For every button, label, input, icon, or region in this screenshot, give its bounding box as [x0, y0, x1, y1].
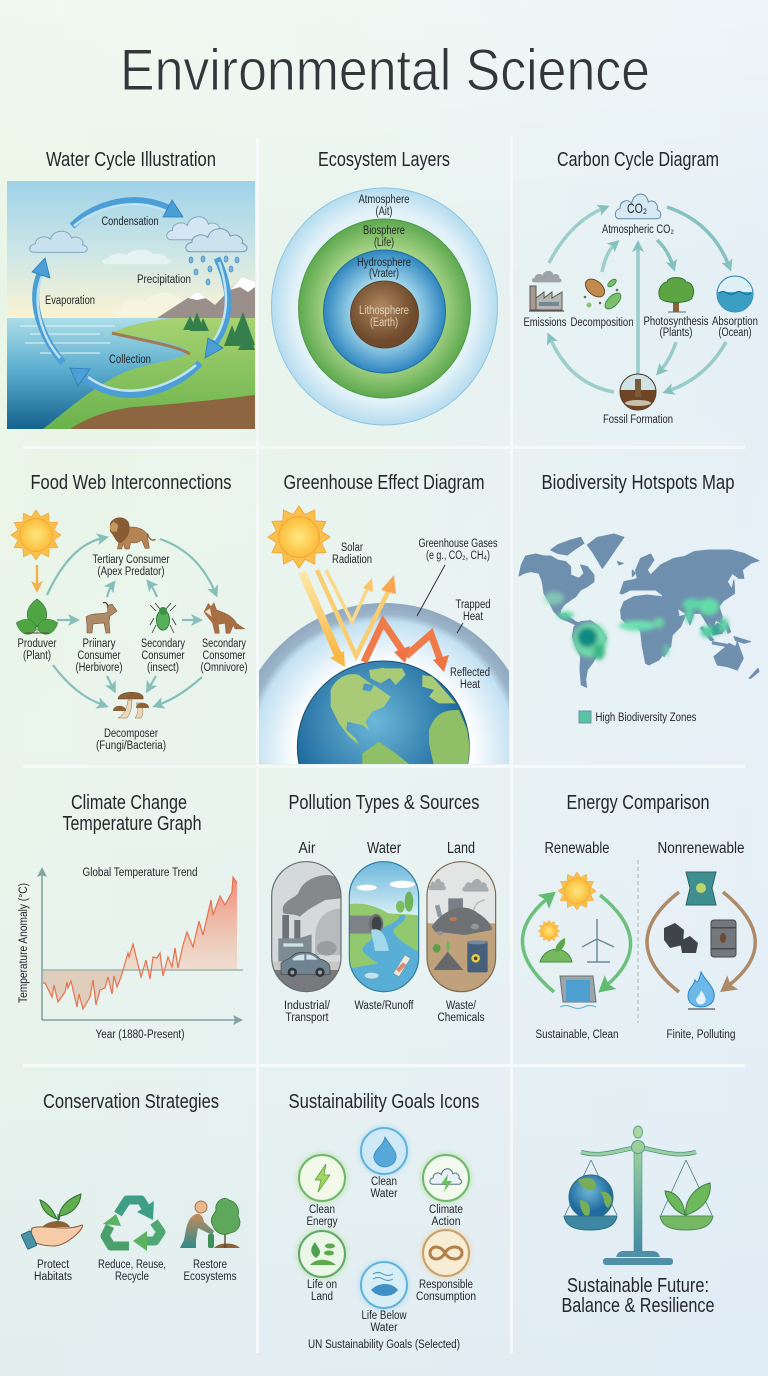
icon: recycling arrows [103, 1200, 161, 1251]
capsule: water pollution: Waste/Runoff [354, 1000, 414, 1012]
icon: sun [268, 506, 330, 568]
diagram: concentric spheres [272, 188, 498, 425]
labels: conservation: Ecosystems [184, 1271, 237, 1283]
goal: clean energy: Clean [309, 1204, 335, 1216]
labels: greenhouse: Radiation [332, 554, 372, 566]
diagram: atmosphere and earth [259, 603, 509, 764]
goal: clean water: Clean [371, 1176, 397, 1188]
panel: energy comparison [522, 792, 755, 1041]
labels: greenhouse [332, 538, 498, 691]
icon: CO2 cloud: CO₂ [627, 200, 647, 216]
goal: life on land: Land [311, 1291, 333, 1303]
icon: oil barrel [711, 920, 736, 957]
heading: ecosystem layers: Ecosystem Layers [318, 149, 450, 171]
diagram: concentric spheres: (Earth) [370, 317, 398, 329]
panel: climate graph [18, 792, 243, 1041]
panel: water cycle [7, 149, 255, 429]
labels: carbon cycle: Fossil Formation [603, 414, 673, 426]
labels: conservation: Habitats [34, 1271, 72, 1283]
labels: food web: Decomposer [104, 728, 158, 740]
labels: food web [18, 554, 248, 752]
capsule: air pollution: Industrial/ [284, 1000, 331, 1012]
heading: climate graph: Climate Change [71, 792, 187, 814]
title: Environmental Science [120, 38, 650, 103]
heading: sustainable future: Balance & Resilience [562, 1295, 714, 1317]
goal: life below water [359, 1260, 409, 1334]
goal: life on land: Life on [307, 1279, 337, 1291]
chart: global temperature trend [18, 867, 243, 1041]
labels: food web: Tertiary Consumer [92, 554, 170, 566]
icon: protecting hand [21, 1194, 83, 1249]
icon: sun [11, 510, 61, 560]
goal: climate action [421, 1153, 471, 1228]
heading: climate graph: Temperature Graph [62, 813, 202, 835]
icon: mushrooms [113, 692, 149, 718]
labels: water cycle: Precipitation [137, 274, 191, 286]
capsule: water pollution: Water [367, 840, 401, 857]
labels: water cycle [45, 216, 191, 366]
diagram: concentric spheres: Atmosphere [358, 194, 410, 206]
column: nonrenewable: Nonrenewable [658, 840, 744, 857]
heading: energy: Energy Comparison [566, 792, 710, 814]
labels: food web: Secondary [141, 638, 185, 650]
heading: conservation: Conservation Strategies [43, 1091, 219, 1113]
heading: sustainable future: Sustainable Future: [567, 1275, 709, 1297]
labels: carbon cycle: Decomposition [570, 317, 634, 329]
heading: climate graph [62, 792, 202, 835]
labels: carbon cycle: Atmospheric CO₂ [602, 224, 674, 236]
capsule: land pollution: Land [447, 840, 475, 857]
panel: sustainability goals [288, 1091, 480, 1351]
capsule: air pollution: Air [298, 840, 316, 857]
labels: conservation [34, 1259, 237, 1283]
labels: carbon cycle: (Plants) [660, 327, 693, 339]
labels: water cycle: Condensation [102, 216, 158, 228]
labels: carbon cycle: Photosynthesis [644, 316, 709, 328]
panel: sustainable future [562, 1126, 714, 1317]
column: renewable: Sustainable, Clean [536, 1029, 618, 1041]
labels: carbon cycle: (Ocean) [718, 327, 752, 339]
labels: greenhouse: Reflected [450, 667, 490, 679]
map: world continents [519, 534, 759, 687]
arrow: sunlight to plant [36, 565, 38, 587]
diagram: concentric spheres: (Ait) [376, 206, 393, 218]
labels: food web: Consumer [78, 650, 121, 662]
chart: global temperature trend: Global Temperature Trend [82, 867, 198, 879]
icon: ocean [716, 276, 754, 314]
labels: greenhouse: Heat [460, 679, 481, 691]
goal: clean water [359, 1126, 409, 1200]
icon: tree [659, 278, 694, 312]
icon: coal [664, 923, 698, 953]
heading: pollution: Pollution Types & Sources [288, 792, 480, 814]
arrows: nonrenewable flow [647, 892, 755, 992]
heading: biodiversity: Biodiversity Hotspots Map [542, 472, 734, 494]
icon: goat [86, 602, 117, 633]
heading: water cycle: Water Cycle Illustration [46, 149, 216, 171]
icon: gas flame [688, 972, 715, 1009]
arrows: solar radiation and reflected heat [302, 570, 449, 672]
panel: pollution types [272, 792, 496, 1024]
icon: wolf [204, 603, 245, 633]
labels: food web: (Plant) [23, 650, 51, 662]
panel: carbon cycle [524, 149, 758, 426]
goal: life on land [297, 1229, 347, 1303]
diagram: concentric spheres: Biosphere [363, 225, 405, 237]
capsule: air pollution: Transport [286, 1012, 329, 1024]
labels: carbon cycle: Emissions [524, 317, 567, 329]
diagram: concentric spheres: (Vrater) [369, 268, 399, 280]
chart: global temperature trend: Temperature Anomaly (°C) [18, 883, 30, 1003]
arrows: water cycle [32, 200, 228, 394]
diagram: concentric spheres: Lithosphere [359, 305, 409, 317]
labels: food web: (Apex Predator) [98, 566, 165, 578]
labels: conservation: Reduce, Reuse, [98, 1259, 166, 1271]
chart: global temperature trend: Year (1880-Present) [96, 1029, 185, 1041]
diagram: concentric spheres: (Life) [374, 237, 394, 249]
labels: food web: Consomer [202, 650, 246, 662]
panel: biodiversity map [519, 472, 759, 724]
heading: goals: Sustainability Goals Icons [288, 1091, 480, 1113]
icon: CO2 cloud [615, 194, 661, 219]
goal: life below water: Life Below [362, 1310, 407, 1322]
labels: water cycle: Evaporation [45, 295, 95, 307]
labels: food web: Priinary [82, 638, 116, 650]
capsule: water pollution [349, 840, 420, 1012]
icon: lion [109, 517, 156, 549]
labels: greenhouse: Greenhouse Gases [418, 538, 498, 550]
labels: food web: (Fungi/Bacteria) [96, 740, 166, 752]
labels: conservation: Recycle [115, 1271, 149, 1283]
icon: factory [529, 271, 564, 311]
capsule: air pollution [272, 840, 341, 1024]
panel: food web [11, 472, 248, 752]
labels: conservation: Restore [193, 1259, 227, 1271]
goal: clean energy: Energy [306, 1216, 338, 1228]
panel: conservation strategies [21, 1091, 240, 1283]
map: biodiversity hotspots [544, 592, 729, 660]
labels: food web: Consumer [142, 650, 185, 662]
goal: responsible consumption [416, 1228, 476, 1303]
heading: sustainable future [562, 1275, 714, 1317]
goal: climate action: Action [432, 1216, 460, 1228]
icon: fuel sack [686, 872, 716, 905]
legend: high biodiversity zones: High Biodiversity Zones [596, 712, 697, 724]
column: renewable [522, 840, 631, 1041]
goal: climate action: Climate [429, 1204, 463, 1216]
labels: greenhouse: (e g., CO₂, CH₄) [426, 550, 490, 562]
diagram: concentric spheres: Hydrosphere [357, 257, 411, 269]
arrows: carbon flows [549, 207, 729, 392]
column: nonrenewable [647, 840, 755, 1041]
goal: responsible consumption: Consumption [416, 1291, 476, 1303]
labels: greenhouse: Solar [341, 542, 363, 554]
labels: food web: Produver [18, 638, 57, 650]
goal: responsible consumption: Responsible [419, 1279, 473, 1291]
illustration: water cycle scene [7, 181, 255, 429]
labels: greenhouse: Heat [463, 611, 484, 623]
labels: conservation: Protect [37, 1259, 70, 1271]
labels: carbon cycle: Absorption [712, 316, 758, 328]
icon: balance scale [564, 1126, 713, 1265]
labels: food web: Secondary [202, 638, 246, 650]
heading: carbon cycle: Carbon Cycle Diagram [557, 149, 719, 171]
heading: food web: Food Web Interconnections [30, 472, 232, 494]
icon: person planting tree [180, 1198, 240, 1248]
labels: food web: (insect) [147, 662, 179, 674]
labels: food web: (Herbivore) [76, 662, 123, 674]
arrows: renewable cycle [522, 895, 631, 992]
legend: high biodiversity zones [579, 711, 697, 724]
capsule: land pollution: Waste/ [446, 1000, 477, 1012]
goal: clean water: Water [370, 1188, 398, 1200]
panel: ecosystem layers [272, 149, 498, 425]
icon: beetle [150, 603, 176, 633]
icon: fossil formation [620, 374, 656, 410]
column: nonrenewable: Finite, Polluting [666, 1029, 736, 1041]
capsule: land pollution: Chemicals [438, 1012, 485, 1024]
capsule: land pollution [427, 840, 496, 1024]
labels: water cycle: Collection [109, 354, 151, 366]
labels: carbon cycle [524, 224, 758, 426]
panel: greenhouse effect [259, 474, 509, 764]
icon: plant [14, 599, 60, 637]
labels: greenhouse: Trapped [456, 599, 490, 611]
labels: food web: (Omnivore) [200, 662, 248, 674]
heading: greenhouse effect: Greenhouse Effect Diagram [284, 472, 484, 494]
arrows: food web flows [47, 538, 215, 705]
column: renewable: Renewable [544, 840, 610, 857]
goal: clean energy [297, 1153, 347, 1228]
caption: UN goals: UN Sustainability Goals (Selected) [308, 1339, 460, 1351]
goal: life below water: Water [370, 1322, 398, 1334]
icon: decomposition microbes [582, 276, 624, 312]
